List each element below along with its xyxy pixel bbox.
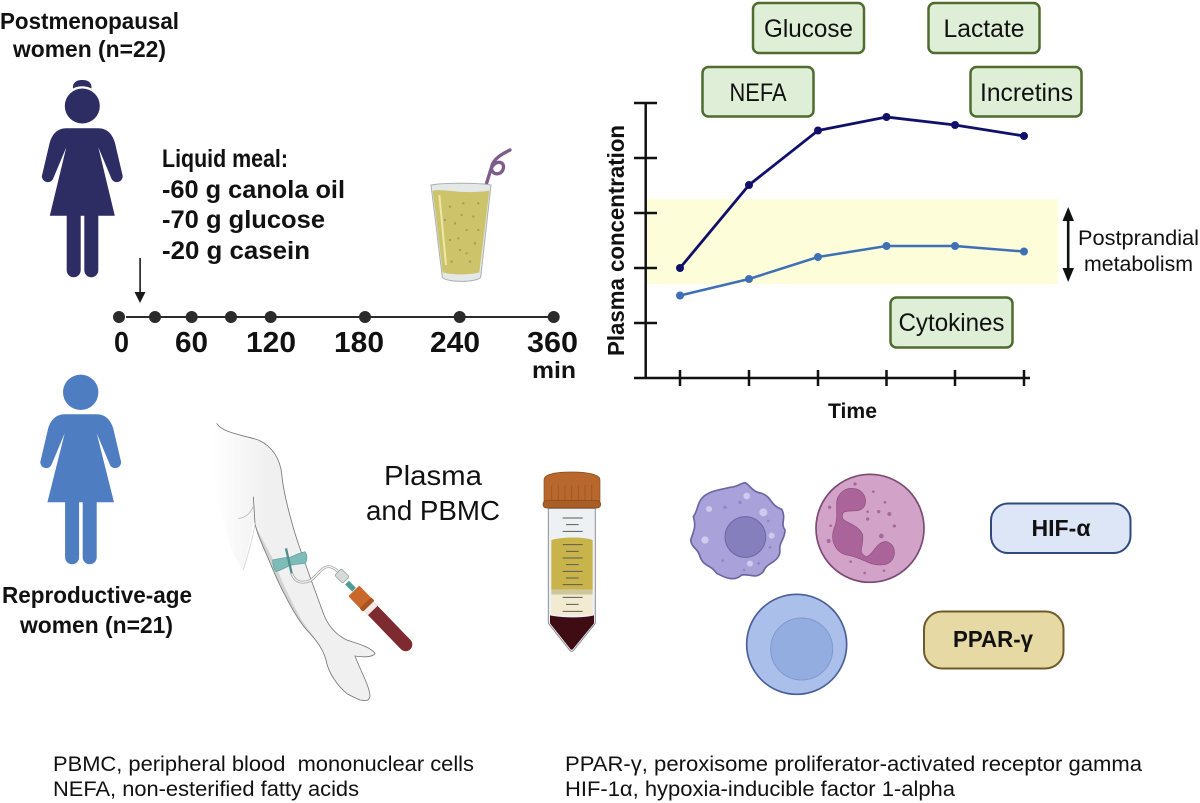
text: liquid meal composition: -20 g casein <box>162 237 310 265</box>
timeline: 0 <box>114 327 129 359</box>
footnote: abbreviations right: HIF-1α, hypoxia-inducible factor 1-alpha <box>565 777 955 801</box>
box: incretins: Incretins <box>980 79 1073 107</box>
box: NEFA <box>702 67 814 116</box>
text: liquid meal composition: -60 g canola oil <box>162 176 345 204</box>
arm <box>213 423 375 701</box>
cell: macrophage <box>691 483 785 579</box>
label: postmenopausal women: women (n=22) <box>12 36 166 62</box>
y axis label: Plasma concentration <box>603 125 629 356</box>
text: liquid meal composition: -70 g glucose <box>162 206 325 234</box>
footnote: abbreviations right <box>565 752 1142 801</box>
graduations <box>563 518 583 611</box>
cell: neutrophil <box>816 474 924 582</box>
illustration: centrifuge tube <box>543 472 601 651</box>
red cell layer <box>550 615 594 650</box>
box: HIF-alpha: HIF-α <box>1032 515 1090 541</box>
arrow: meal ingestion <box>134 258 146 303</box>
box: cytokines <box>890 298 1012 348</box>
box: cytokines: Cytokines <box>898 309 1004 337</box>
footnote: abbreviations right: PPAR-γ, peroxisome proliferator-activated receptor gamma <box>565 752 1142 776</box>
label: reproductive-age women: Reproductive-age <box>2 582 192 608</box>
icon: reproductive-age woman <box>40 375 121 564</box>
timeline <box>113 311 578 383</box>
text: liquid meal composition: Liquid meal: <box>162 145 288 173</box>
text: postprandial metabolism: metabolism <box>1084 252 1193 276</box>
text: plasma and PBMC <box>366 460 500 526</box>
box: glucose: Glucose <box>764 15 853 43</box>
tube body <box>548 508 595 651</box>
box: HIF-alpha <box>991 504 1130 553</box>
text: plasma and PBMC: and PBMC <box>366 495 500 526</box>
illustration: arm with blood draw <box>213 423 416 701</box>
text: liquid meal composition <box>162 145 345 265</box>
timeline: 180 <box>334 327 384 359</box>
box: lactate <box>928 3 1040 53</box>
label: reproductive-age women <box>2 582 192 638</box>
box: lactate: Lactate <box>944 15 1024 43</box>
PBMC layer <box>551 595 593 615</box>
blood tube <box>348 585 416 655</box>
line: reproductive-age women <box>676 242 1028 300</box>
footnote: abbreviations left: NEFA, non-esterified fatty acids <box>53 777 359 801</box>
timeline: 120 <box>246 327 296 359</box>
arrow: postprandial range <box>1062 207 1074 282</box>
chart: postprandial plasma concentration <box>603 103 1058 423</box>
highlight band: postprandial metabolism <box>646 199 1058 284</box>
label: postmenopausal women: Postmenopausal <box>0 8 179 34</box>
connector <box>335 569 349 583</box>
footnote: abbreviations left: PBMC, peripheral blood mononuclear cells <box>53 752 474 776</box>
text: plasma and PBMC: Plasma <box>384 460 482 491</box>
box: PPAR-gamma: PPAR-γ <box>953 626 1033 652</box>
axes <box>634 103 1030 386</box>
butterfly needle tubing <box>292 567 340 582</box>
icon: postmenopausal woman <box>42 80 123 277</box>
text: postprandial metabolism <box>1078 226 1199 276</box>
text: postprandial metabolism: Postprandial <box>1078 226 1199 250</box>
line: postmenopausal women <box>676 113 1028 272</box>
timeline: 240 <box>430 327 480 359</box>
label: reproductive-age women: women (n=21) <box>19 612 173 638</box>
box: incretins <box>970 67 1082 116</box>
label: postmenopausal women <box>0 8 179 62</box>
plasma layer <box>551 537 593 590</box>
box: PPAR-gamma <box>924 612 1064 668</box>
cap <box>544 472 600 503</box>
timeline: 360 <box>527 327 578 359</box>
timeline: min <box>532 357 576 383</box>
box: NEFA: NEFA <box>730 79 787 107</box>
icon: liquid meal glass with straw <box>431 150 510 281</box>
timeline: 60 <box>175 327 208 359</box>
cell: lymphocyte <box>747 594 847 694</box>
footnote: abbreviations left <box>53 752 474 801</box>
box: glucose <box>753 3 864 53</box>
x axis label: Time <box>828 399 877 423</box>
butterfly wings <box>273 552 307 572</box>
